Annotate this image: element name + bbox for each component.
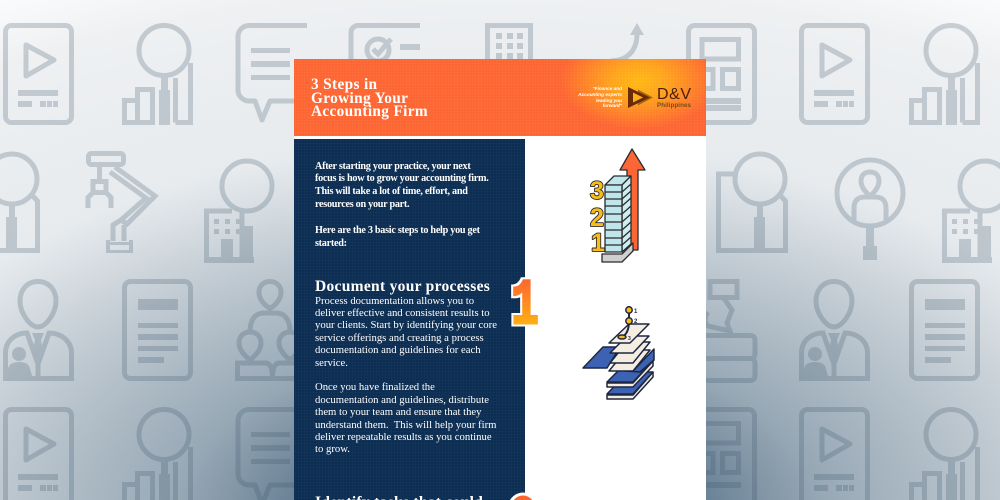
icon: document magnifier right bbox=[718, 154, 786, 253]
body: step 1: to grow. bbox=[315, 443, 350, 455]
intro text: Here are the 3 basic steps to help you get bbox=[315, 225, 480, 236]
icon: chat bubble bbox=[238, 26, 307, 120]
body: step 1: service. bbox=[315, 357, 348, 369]
numerals 3 2 1: 3 bbox=[590, 177, 604, 205]
icon: stacked books and hand bbox=[680, 282, 755, 380]
body: step 1: documentation and guidelines, distribute bbox=[315, 394, 489, 406]
rising arrow bbox=[620, 149, 645, 250]
blue stack bbox=[583, 347, 654, 399]
tagline: Accounting experts bbox=[578, 92, 622, 97]
title bbox=[311, 76, 428, 120]
icon: robot arm bbox=[88, 154, 155, 253]
icon: magnifier over bar chart bbox=[124, 26, 190, 125]
icon: businessman right bbox=[802, 282, 868, 379]
icon: rising arrow bbox=[610, 23, 644, 61]
numerals 3 2 1: 1 bbox=[591, 229, 605, 257]
body: step 1 bbox=[315, 294, 497, 455]
tagline: leading you bbox=[596, 98, 622, 103]
numbered beads: 2 bbox=[634, 319, 638, 325]
title: Growing Your bbox=[311, 90, 408, 106]
tagline: forward" bbox=[603, 103, 622, 108]
icon: seated group bbox=[238, 282, 308, 378]
icon: magnifier chart right bbox=[912, 26, 978, 125]
icon: person magnifier bbox=[837, 160, 903, 260]
heading: document your processes: Document your processes bbox=[315, 278, 490, 294]
icon: cropped document magnifier bbox=[0, 154, 38, 253]
navy text panel bbox=[294, 139, 525, 500]
header banner bbox=[294, 59, 706, 136]
illustration: documents flowchart bbox=[582, 306, 655, 400]
numerals 3 2 1: 2 bbox=[590, 204, 604, 232]
body: step 1: them to your team and ensure that they bbox=[315, 406, 482, 418]
numbered beads: 1 bbox=[634, 309, 638, 315]
icon: video document right bbox=[802, 26, 868, 122]
body: step 1: deliver effective and consistent results to bbox=[315, 307, 490, 319]
tagline: "Finance and bbox=[592, 86, 622, 91]
intro text: After starting your practice, your next bbox=[315, 160, 470, 172]
intro text: started: bbox=[315, 238, 347, 249]
infographic page bbox=[294, 59, 706, 500]
logo: D&V bbox=[657, 86, 691, 103]
cream pages bbox=[609, 324, 650, 371]
icon: building magnifier bbox=[204, 161, 272, 263]
tower bbox=[602, 176, 633, 262]
icon: businessman bbox=[6, 282, 72, 379]
intro text: focus is how to grow your accounting firm. bbox=[315, 173, 488, 184]
numbered beads: 3 bbox=[628, 336, 631, 342]
title: 3 Steps in bbox=[311, 76, 377, 93]
icon: report page bbox=[124, 282, 190, 378]
icon: video document row 4 right bbox=[802, 410, 868, 500]
intro text: resources on your part. bbox=[315, 199, 409, 210]
body: step 1: deliver repeatable results as you continue bbox=[315, 431, 492, 443]
step number 2 bbox=[510, 492, 532, 500]
icon: page layout row 4 bbox=[688, 410, 754, 500]
body: step 1: service offerings and creating a process bbox=[315, 332, 484, 344]
icon: magnifier chart row 4 right bbox=[912, 410, 978, 500]
intro text: This will take a lot of time, effort, and bbox=[315, 186, 468, 197]
logo: Philippines bbox=[657, 102, 692, 109]
logo bbox=[628, 86, 692, 109]
title: Accounting Firm bbox=[311, 103, 428, 120]
body: step 1: understand them. This will help your firm bbox=[315, 419, 496, 431]
icon: checklist bbox=[351, 26, 420, 70]
icon: office tower bbox=[488, 26, 530, 70]
body: step 1: your clients. Start by identifying your core bbox=[315, 319, 497, 331]
icon: report page right bbox=[912, 282, 978, 378]
icon: page layout bbox=[688, 26, 754, 122]
body: step 1: Once you have finalized the bbox=[315, 381, 435, 393]
illustration: tower and arrow bbox=[590, 148, 646, 263]
body: step 1: documentation and guidelines for each bbox=[315, 344, 481, 356]
body: step 1: Process documentation allows you to bbox=[315, 294, 474, 306]
icon: video document row 4 bbox=[6, 410, 72, 500]
numbered beads bbox=[618, 306, 638, 342]
numerals 3 2 1 bbox=[590, 177, 605, 257]
icon: chat bubble row 4 bbox=[238, 410, 307, 500]
icon: video document bbox=[6, 26, 72, 122]
icon: building magnifier right bbox=[942, 161, 1000, 263]
intro text bbox=[315, 160, 488, 249]
icon: magnifier chart row 4 bbox=[124, 410, 190, 500]
tagline bbox=[578, 86, 622, 108]
